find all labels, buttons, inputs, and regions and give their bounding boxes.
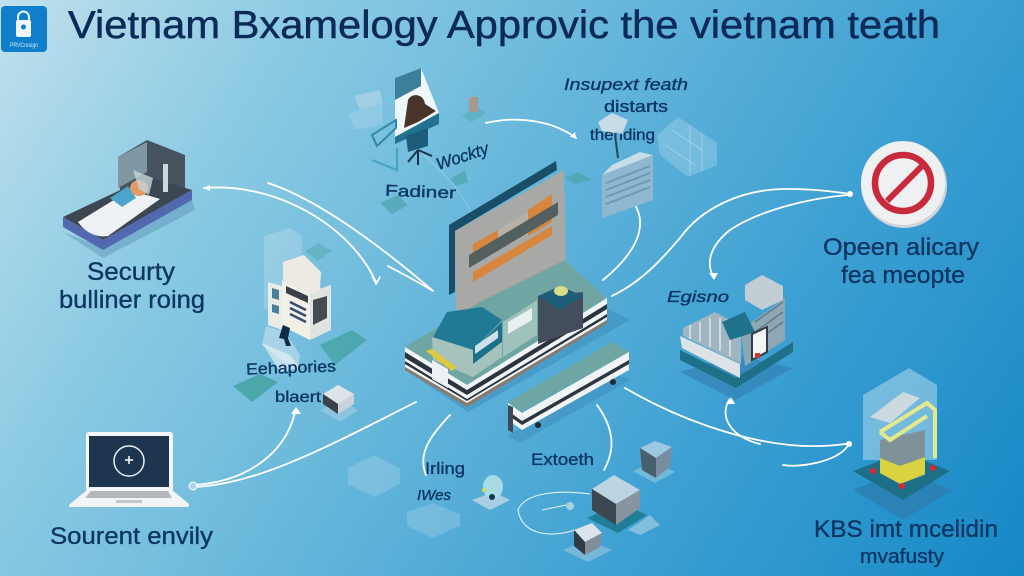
label: blaert: blaert <box>275 389 322 406</box>
arrowheads <box>189 132 853 490</box>
label: Open: Opeen alicary <box>823 234 979 261</box>
body <box>433 307 502 350</box>
label: Insupext: distarts <box>604 97 668 116</box>
label: KBS <box>814 516 998 568</box>
label: Open: fea meopte <box>841 262 965 289</box>
label: KBS: KBS imt mcelidin <box>814 516 998 543</box>
teal tiles <box>380 170 592 214</box>
label: Eehagories: Eehapories <box>246 358 336 379</box>
icon: globe node <box>472 475 510 510</box>
big screen <box>449 161 557 295</box>
label: Insupext: Insupext feath <box>564 75 688 94</box>
illustration: central kiosk machine <box>405 161 630 412</box>
title: Vietnam Bxamelogy Approvic the vietnam teath <box>68 4 940 47</box>
arrows <box>193 120 851 487</box>
illustration: yellow module <box>853 368 952 520</box>
label: Open <box>823 234 979 289</box>
illustration: data tower <box>598 113 717 218</box>
yellow bumper <box>426 349 456 371</box>
label: Security: bulliner roing <box>59 286 205 314</box>
illustration: server kiosk <box>262 228 367 372</box>
label: Security <box>59 258 205 314</box>
label: Fadiner: Fadiner <box>385 183 457 202</box>
illustration: side bench <box>507 342 630 443</box>
icon: lock badge: PRVCresign <box>10 43 38 49</box>
icon: small server <box>320 385 358 422</box>
base deck <box>405 260 607 385</box>
label: Iwes: IWes <box>417 487 451 504</box>
label: Wockty: Wockty <box>434 139 492 174</box>
illustration: laptop <box>69 432 189 507</box>
illustration: no-entry badge <box>861 141 947 228</box>
label: Insupext <box>564 75 688 144</box>
label: Insupext: thending <box>590 127 655 144</box>
icon: lock badge <box>1 6 47 52</box>
cluster: servers <box>518 441 675 562</box>
faded blocks <box>348 455 460 538</box>
illustration: hospital bed pod <box>63 140 195 258</box>
label: KBS: mvafusty <box>860 546 944 568</box>
label: Egisno: Egisno <box>667 289 729 306</box>
label: Security: Securty <box>87 258 176 286</box>
shadow <box>405 300 630 412</box>
illustration: desk worker <box>348 68 486 170</box>
illustration: glass building <box>680 275 793 400</box>
teal tile <box>233 374 278 402</box>
label: Sourent: Sourent envily <box>50 523 213 550</box>
label: Irling: Irling <box>425 459 465 478</box>
label: Extoeth: Extoeth <box>531 450 594 469</box>
